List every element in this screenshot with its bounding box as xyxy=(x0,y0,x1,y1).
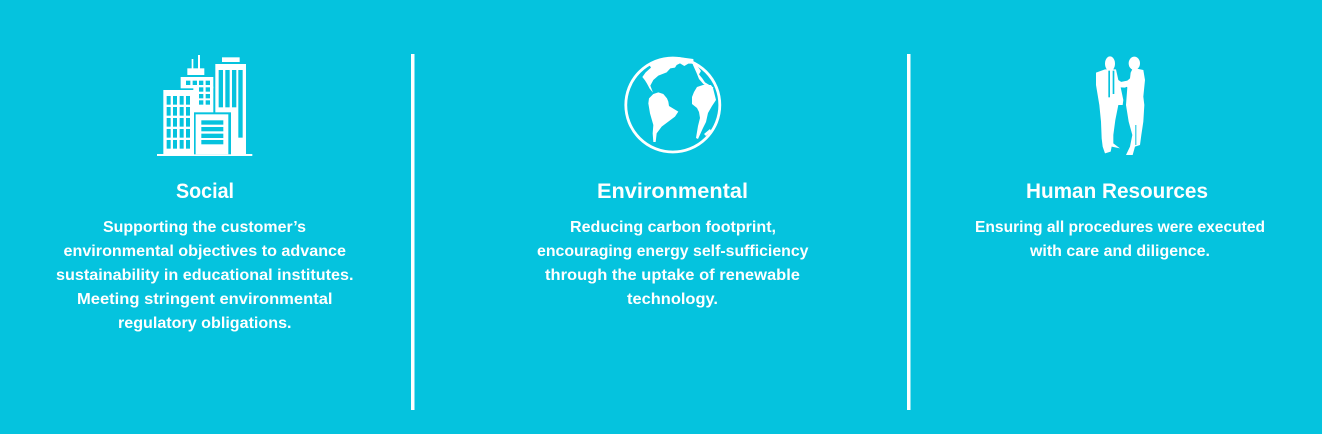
heading: Social: Social xyxy=(176,180,234,203)
text block: environmental description xyxy=(537,219,809,308)
text block: social description xyxy=(56,219,354,332)
panel: social xyxy=(56,55,354,332)
text block: environmental description: encouraging energy self-sufficiency xyxy=(537,243,809,260)
text block: human resources description: with care and diligence. xyxy=(1029,243,1210,260)
text block: environmental description: Reducing carbon footprint, xyxy=(570,219,776,236)
text block: human resources description xyxy=(975,219,1265,260)
heading: Human Resources: Human Resources xyxy=(1026,180,1208,203)
panel: human resources xyxy=(975,56,1265,260)
heading: Environmental: Environmental xyxy=(597,180,748,203)
icon: globe xyxy=(626,57,720,152)
text block: social description: environmental objectives to advance xyxy=(64,243,346,260)
panel: environmental xyxy=(537,57,809,308)
text block: environmental description: through the uptake of renewable xyxy=(545,267,800,284)
text block: social description: Supporting the customer’s xyxy=(103,219,306,236)
text block: social description: regulatory obligations. xyxy=(118,315,292,332)
icon: business people xyxy=(1096,56,1145,155)
text block: social description: sustainability in educational institutes. xyxy=(56,267,354,284)
text block: environmental description: technology. xyxy=(627,291,718,308)
icon: city buildings xyxy=(157,55,252,156)
text block: social description: Meeting stringent environmental xyxy=(77,291,332,308)
text block: human resources description: Ensuring all procedures were executed xyxy=(975,219,1265,236)
